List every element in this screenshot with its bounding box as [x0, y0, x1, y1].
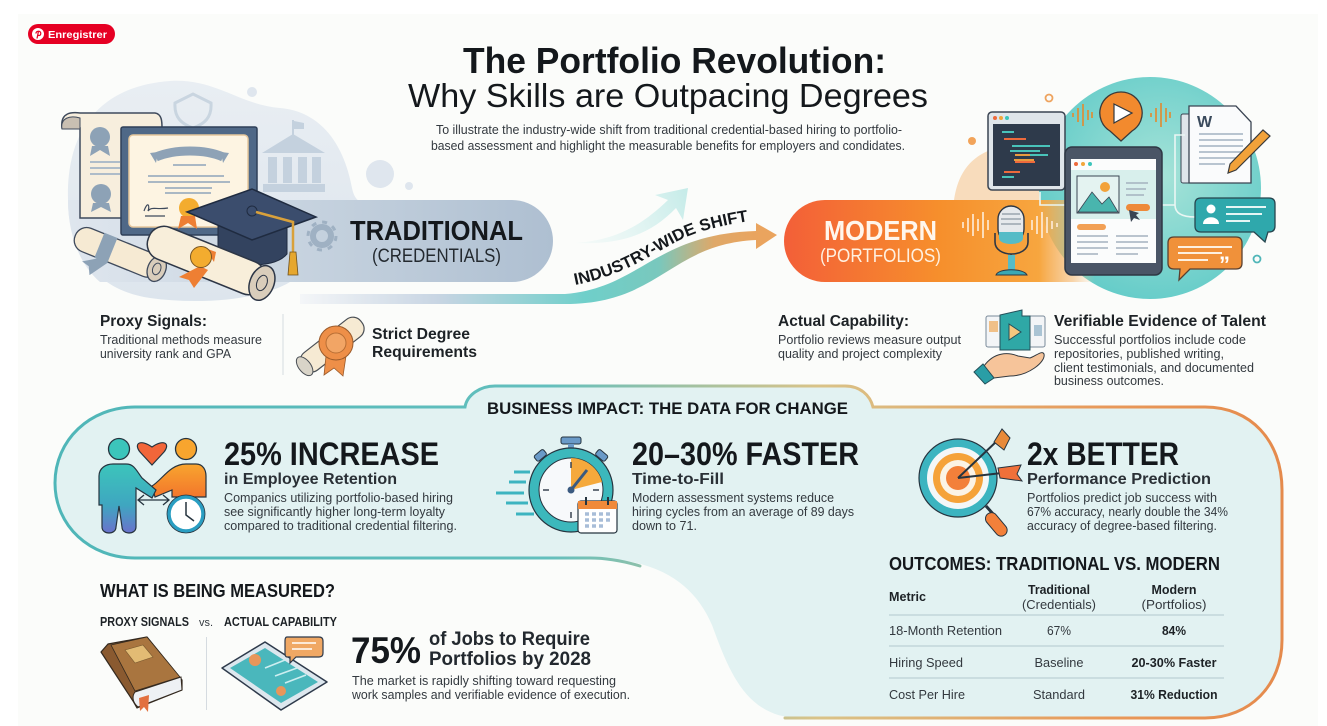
- stat: speed: [632, 436, 859, 533]
- icon: degree seal: [293, 313, 368, 379]
- traditional label: TRADITIONAL: [350, 215, 523, 246]
- text: strict degree: Strict Degree: [372, 326, 470, 343]
- credentials label: (CREDENTIALS): [372, 246, 501, 267]
- text: proxy signals: Proxy Signals:: [100, 313, 207, 330]
- section: what is being measured: PROXY SIGNALS: [100, 615, 189, 629]
- connector lines: [1040, 135, 1195, 217]
- tablet: [1065, 147, 1162, 275]
- stat: prediction: Portfolios predict job success with: [1027, 491, 1217, 505]
- stat: retention: compared to traditional credential filtering.: [224, 519, 457, 533]
- table: outcomes: Cost Per Hire: [889, 687, 965, 702]
- table: outcomes: 18-Month Retention: [889, 623, 1002, 638]
- stat: 75 percent: The market is rapidly shifting toward requesting: [352, 674, 616, 688]
- table: outcomes: Modern: [1152, 582, 1197, 597]
- rolled scroll small: [64, 223, 170, 301]
- icon: gear: [308, 222, 336, 250]
- graduation cap: [187, 189, 316, 275]
- pale shield: [175, 94, 211, 128]
- orange speech bubble: [1168, 237, 1242, 280]
- title: [408, 40, 928, 114]
- text: verifiable evidence: client testimonials, and documented: [1054, 361, 1254, 375]
- sound waves: [963, 212, 1057, 238]
- table: outcomes: 20-30% Faster: [1132, 655, 1216, 670]
- background blob: [68, 81, 366, 301]
- icon: microphone: [995, 206, 1028, 275]
- stat: prediction: [1027, 436, 1228, 533]
- table: outcomes: (Credentials): [1022, 597, 1096, 612]
- table: outcomes: (Portfolios): [1142, 597, 1206, 612]
- table: outcomes: 84%: [1162, 623, 1186, 638]
- stat: retention: in Employee Retention: [224, 471, 397, 488]
- icon: target: [919, 429, 1022, 539]
- section: what is being measured: [100, 581, 630, 712]
- stat: prediction: 67% accuracy, nearly double the 34%: [1027, 505, 1228, 519]
- teal speech bubble: [1195, 198, 1275, 242]
- text: proxy signals: [100, 313, 262, 361]
- panel: modern pill: [784, 200, 1095, 282]
- save button: [28, 24, 115, 44]
- section: what is being measured: vs.: [199, 617, 213, 629]
- stat: prediction: Performance Prediction: [1027, 471, 1211, 488]
- orange seal: [179, 246, 216, 288]
- table: outcomes: 67%: [1047, 623, 1071, 638]
- panel: business impact: [55, 386, 1282, 718]
- framed diploma: [121, 127, 257, 235]
- panel: traditional pill: [68, 200, 553, 282]
- table: outcomes: Metric: [889, 589, 926, 604]
- document and pencil: [1181, 106, 1270, 183]
- title: Why Skills are Outpacing Degrees: [408, 77, 928, 114]
- modern label: MODERN: [824, 215, 937, 246]
- illustration: traditional credentials: [62, 113, 316, 304]
- arrow: ghost up arrow: [575, 188, 688, 243]
- table: outcomes: Hiring Speed: [889, 655, 963, 670]
- text: verifiable evidence: repositories, published writing,: [1054, 347, 1224, 361]
- portfolios label: (PORTFOLIOS): [820, 246, 941, 267]
- table: outcomes: [889, 554, 1224, 702]
- text: actual capability: Portfolio reviews measure output: [778, 333, 962, 347]
- save button: Enregistrer: [48, 29, 107, 41]
- stat: retention: [224, 436, 457, 533]
- text: strict degree: [372, 326, 477, 361]
- icon: book: [101, 637, 182, 712]
- rolled scroll large: [142, 221, 280, 304]
- table: outcomes: Baseline: [1034, 655, 1084, 670]
- document and pencil: W: [1197, 114, 1213, 131]
- small circles: [968, 94, 1260, 262]
- text: strict degree: Requirements: [372, 344, 477, 361]
- section: what is being measured: WHAT IS BEING MEASURED?: [100, 581, 335, 601]
- text: actual capability: [778, 313, 962, 361]
- teal circle: [1039, 77, 1261, 299]
- back certificate: [62, 113, 162, 218]
- illustration: modern portfolios: [968, 92, 1275, 280]
- intro text: To illustrate the industry-wide shift from traditional credential-based hiring to portfolio-: [436, 123, 902, 137]
- stat: speed: Modern assessment systems reduce: [632, 491, 834, 505]
- code window: [988, 112, 1065, 190]
- play bubble: [1073, 92, 1170, 141]
- text: actual capability: Actual Capability:: [778, 313, 909, 330]
- intro text: [431, 123, 905, 153]
- stat: 75 percent: 75%: [351, 630, 421, 671]
- stat: prediction: 2x BETTER: [1027, 436, 1179, 472]
- icon: portfolio in hand: [974, 310, 1045, 384]
- stat: speed: 20–30% FASTER: [632, 436, 859, 472]
- stat: retention: 25% INCREASE: [224, 436, 439, 472]
- orange speech bubble: ”: [1219, 252, 1230, 277]
- pale building: [262, 120, 325, 192]
- intro text: based assessment and highlight the measurable benefits for employers and condidates.: [431, 139, 905, 153]
- stat: speed: down to 71.: [632, 519, 697, 533]
- title: The Portfolio Revolution:: [463, 40, 886, 81]
- text: actual capability: quality and project complexity: [778, 347, 943, 361]
- stat: speed: Time-to-Fill: [632, 471, 724, 488]
- table: outcomes: 31% Reduction: [1130, 687, 1218, 702]
- stat: prediction: accuracy of degree-based filtering.: [1027, 519, 1217, 533]
- arrow label: INDUSTRY-WIDE SHIFT: [574, 210, 747, 285]
- floating dots: [247, 87, 413, 190]
- stat: 75 percent: work samples and verifiable evidence of execution.: [351, 688, 630, 702]
- table: outcomes: OUTCOMES: TRADITIONAL VS. MODERN: [889, 554, 1220, 574]
- stat: 75 percent: Portfolios by 2028: [429, 649, 591, 670]
- text: verifiable evidence: [1054, 313, 1266, 388]
- stat: 75 percent: [351, 629, 630, 702]
- text: verifiable evidence: Successful portfolios include code: [1054, 333, 1246, 347]
- text: verifiable evidence: Verifiable Evidence of Talent: [1054, 313, 1266, 330]
- icon: retention people: [99, 438, 206, 533]
- stat: speed: hiring cycles from an average of 89 days: [632, 505, 854, 519]
- table: outcomes: Standard: [1033, 687, 1085, 702]
- section: what is being measured: ACTUAL CAPABILITY: [224, 615, 338, 629]
- heading: BUSINESS IMPACT: THE DATA FOR CHANGE: [487, 399, 848, 418]
- text: proxy signals: Traditional methods measure: [100, 333, 262, 347]
- stat: 75 percent: of Jobs to Require: [429, 629, 590, 650]
- stat: retention: see significantly higher long-term loyalty: [224, 505, 446, 519]
- text: proxy signals: university rank and GPA: [100, 347, 232, 361]
- arrow: industry-wide shift: [304, 210, 777, 304]
- text: verifiable evidence: business outcomes.: [1054, 374, 1164, 388]
- icon: stopwatch: [496, 437, 617, 533]
- icon: tablet with chat: [222, 637, 327, 710]
- modern backdrop: [954, 77, 1261, 299]
- table: outcomes: Traditional: [1028, 582, 1090, 597]
- stat: retention: Companics utilizing portfolio-based hiring: [224, 491, 453, 505]
- orange blob behind: [954, 146, 1060, 200]
- traditional backdrop: [68, 81, 413, 301]
